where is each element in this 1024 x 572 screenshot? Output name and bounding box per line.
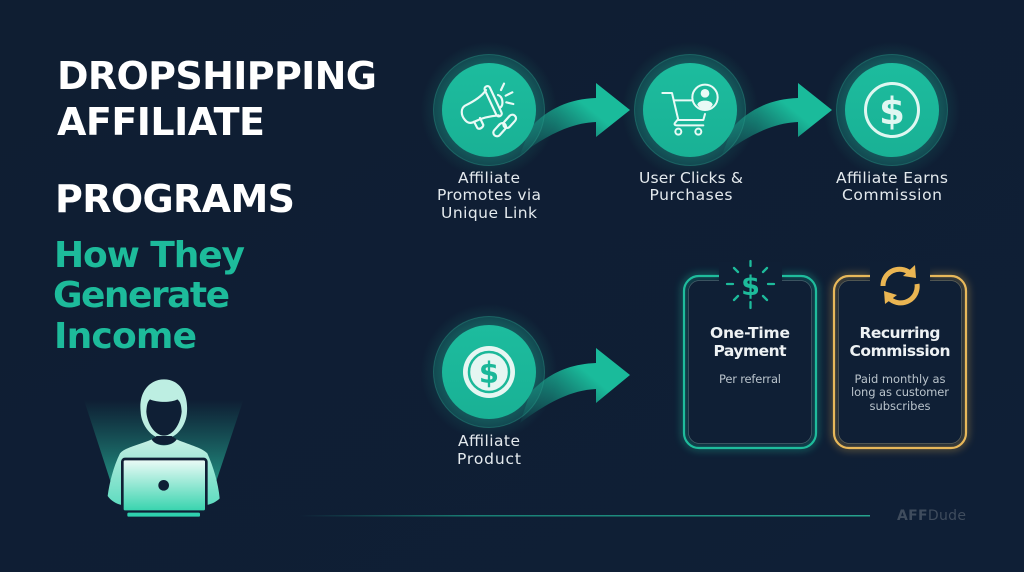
label: [437, 169, 541, 222]
icon: megaphone and link: [462, 84, 518, 138]
label: Commission: [842, 186, 942, 204]
circle 1: [421, 42, 557, 178]
card title: [850, 324, 950, 360]
circle 4: [421, 304, 557, 440]
card title: [710, 324, 790, 360]
card text: Per referral: [719, 372, 781, 386]
step 1: affiliate promotes: [421, 42, 630, 222]
arrow 2: [722, 83, 832, 155]
subtitle: [53, 235, 245, 357]
label: User Clicks &: [639, 169, 743, 187]
title: AFFILIATE: [57, 100, 265, 144]
watermark: AFFDude: [897, 508, 966, 524]
icon: white coin: $: [479, 356, 499, 390]
arrow 3: [520, 348, 630, 423]
circle 3: [824, 42, 960, 178]
arrow 1: [520, 83, 630, 155]
label: Affiliate: [458, 432, 520, 450]
label: [639, 169, 743, 204]
card title: Payment: [714, 342, 787, 360]
label: Affiliate Earns: [836, 169, 948, 187]
icon: recurring arrows: [883, 265, 917, 304]
card title: Recurring: [860, 324, 940, 342]
label: [836, 169, 948, 204]
card text: subscribes: [870, 399, 930, 413]
card: recurring commission: [834, 262, 966, 448]
card: one-time payment: [684, 261, 816, 448]
icon: dollar with rays: $: [741, 271, 760, 302]
card text: [851, 372, 949, 413]
card title: One-Time: [710, 324, 790, 342]
icon: dollar coin: [866, 84, 918, 136]
title: [55, 54, 377, 221]
illustration: person at laptop: [84, 379, 243, 517]
subtitle: How They: [54, 235, 245, 276]
label: Promotes via: [437, 186, 541, 204]
icon: cart and user: [662, 85, 718, 135]
title: DROPSHIPPING: [57, 54, 377, 98]
affiliate product: [421, 304, 630, 468]
icon: dollar with rays: [727, 261, 774, 308]
card title: Commission: [850, 342, 950, 360]
card text: long as customer: [851, 385, 949, 399]
title: PROGRAMS: [55, 177, 295, 221]
step 2: user clicks: [622, 42, 832, 204]
label: Purchases: [650, 186, 732, 204]
circle 2: [622, 42, 758, 178]
card text: Paid monthly as: [854, 372, 946, 386]
icon: dollar coin: $: [879, 90, 905, 133]
label: Unique Link: [441, 204, 537, 222]
subtitle: Income: [54, 316, 197, 357]
step 3: affiliate earns: [824, 42, 960, 204]
label: [457, 432, 521, 468]
label: Product: [457, 450, 521, 468]
icon: white coin: [463, 346, 515, 398]
label: Affiliate: [458, 169, 520, 187]
subtitle: Generate: [53, 275, 230, 316]
